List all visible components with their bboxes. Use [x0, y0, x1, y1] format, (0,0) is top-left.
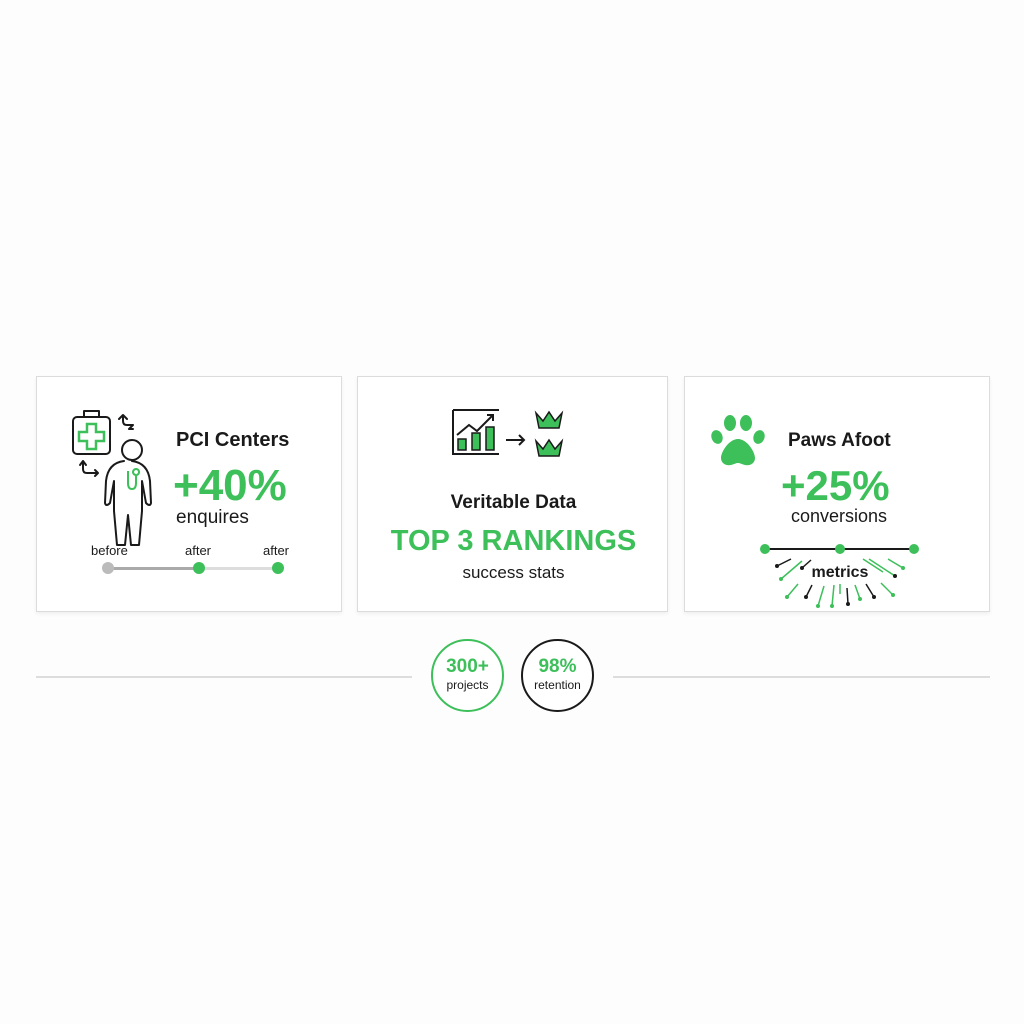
stat: TOP 3 RANKINGS — [391, 525, 636, 557]
heading: Veritable Data — [451, 492, 576, 513]
badge: 98% retention: 98% — [538, 656, 577, 677]
icon: medical kit and person — [72, 410, 152, 546]
badge: 300+ projects: projects — [446, 678, 489, 692]
metrics graphic — [760, 544, 919, 608]
icon: paw — [711, 415, 765, 466]
badge: 300+ projects — [431, 639, 504, 712]
badge: 98% retention — [521, 639, 594, 712]
timeline: before — [91, 543, 128, 558]
badge: 300+ projects: 300+ — [446, 656, 489, 677]
badge: 98% retention: retention — [534, 678, 581, 692]
timeline: after — [185, 543, 211, 558]
icon: chart to crowns — [452, 409, 564, 457]
metrics graphic: metrics — [812, 564, 869, 581]
timeline — [91, 543, 289, 574]
divider lines — [36, 676, 412, 678]
stat: +40% — [173, 461, 287, 510]
timeline: after — [263, 543, 289, 558]
label: conversions — [791, 506, 887, 526]
label: success stats — [462, 563, 565, 582]
heading: PCI Centers — [176, 429, 289, 451]
panel: Veritable Data — [357, 376, 668, 612]
label: enquires — [176, 507, 249, 528]
heading: Paws Afoot — [788, 430, 891, 451]
panel: Paws Afoot — [684, 376, 990, 612]
stat: +25% — [781, 462, 890, 509]
panel: PCI Centers — [36, 376, 342, 612]
